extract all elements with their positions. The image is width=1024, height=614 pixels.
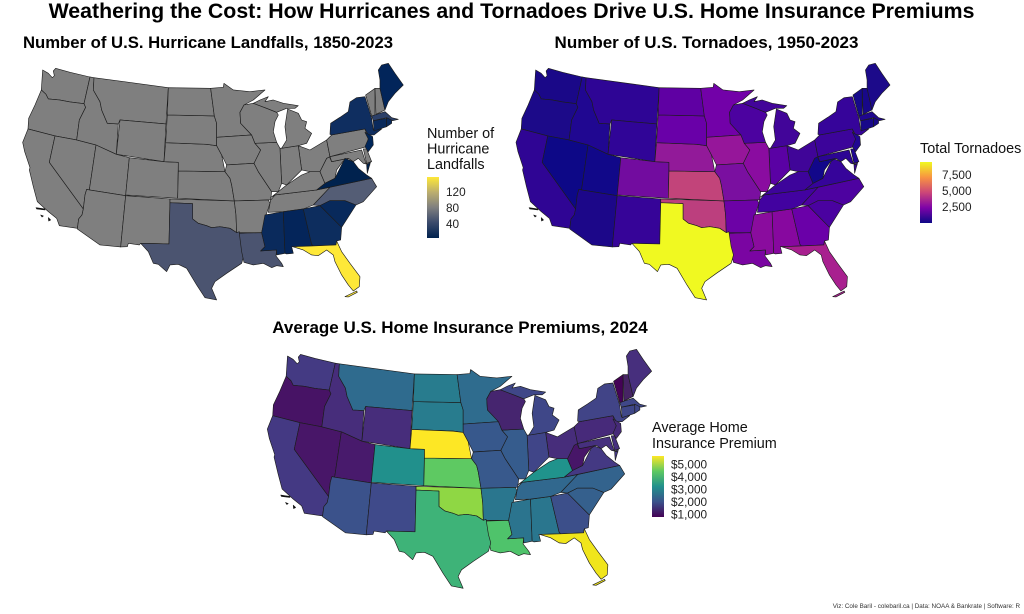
tick labels: $4,000	[671, 470, 708, 484]
colour bar	[920, 162, 932, 223]
tick labels: 40	[446, 217, 460, 231]
map: hurricane landfalls	[23, 63, 403, 300]
tick labels: $3,000	[671, 482, 708, 496]
heading: tornado map: Number of U.S. Tornadoes, 1950-2023	[555, 33, 858, 52]
legend title: Hurricane	[427, 142, 489, 158]
tick labels: 80	[446, 201, 460, 215]
legend title: Landfalls	[427, 157, 485, 173]
tick labels: 120	[446, 185, 466, 199]
tick labels: 7,500	[942, 168, 972, 182]
state: Nebraska (highest premium)	[410, 429, 472, 459]
state: Texas (most tornadoes)	[632, 203, 733, 300]
source credit: Viz: Cole Baril - colebaril.ca | Data: NOAA & Bankrate | Software: R	[833, 603, 1020, 610]
state: Florida (highest landfalls)	[293, 241, 360, 297]
colour bar	[427, 177, 439, 238]
tick labels: $2,000	[671, 495, 708, 509]
legend: total tornadoes	[920, 141, 1021, 223]
legend title: Insurance Premium	[652, 436, 777, 452]
colour bar	[652, 456, 664, 517]
legend: hurricane landfalls	[427, 126, 495, 238]
map: total tornadoes	[516, 63, 890, 300]
legend: average home insurance premium	[652, 420, 777, 522]
tick labels: $1,000	[671, 508, 708, 522]
heading: hurricane map: Number of U.S. Hurricane Landfalls, 1850-2023	[23, 33, 393, 52]
tick labels: $5,000	[671, 458, 708, 472]
legend title: Average Home	[652, 420, 748, 436]
tick labels: 5,000	[942, 184, 972, 198]
legend title: Total Tornadoes	[920, 141, 1021, 157]
legend title: Number of	[427, 126, 495, 142]
heading: insurance map: Average U.S. Home Insurance Premiums, 2024	[272, 318, 648, 337]
map: home insurance premiums	[267, 349, 652, 588]
tick labels: 2,500	[942, 200, 972, 214]
